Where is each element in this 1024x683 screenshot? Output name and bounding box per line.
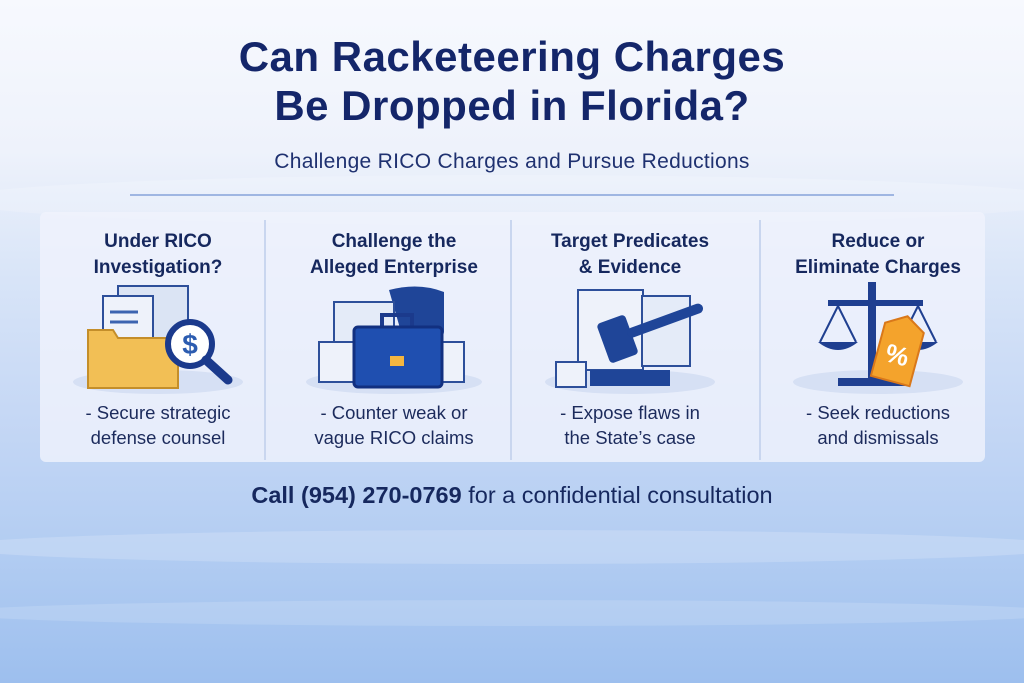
icon: folder with magnifier	[73, 285, 243, 394]
column: target predicates: & Evidence	[579, 257, 681, 278]
column: target predicates: Target Predicates	[551, 231, 709, 252]
call to action: Call (954) 270-0769 for a confidential consultation	[251, 482, 773, 508]
icon: scales with price tag: %	[882, 337, 912, 372]
column: challenge enterprise: Alleged Enterprise	[310, 257, 478, 278]
column: under investigation: Under RICO	[104, 231, 212, 252]
column: under investigation: - Secure strategic	[86, 402, 230, 423]
panel: four steps	[40, 212, 985, 462]
column: reduce charges	[793, 231, 963, 448]
column: reduce charges: - Seek reductions	[806, 402, 950, 423]
icon: briefcase with shield	[306, 286, 482, 394]
column: target predicates	[545, 231, 715, 448]
icon: gavel with documents	[545, 289, 715, 394]
icon: folder with magnifier: $	[182, 329, 198, 360]
title: Be Dropped in Florida?	[274, 82, 750, 129]
column: challenge enterprise: - Counter weak or	[320, 402, 468, 423]
column: under investigation	[73, 231, 243, 448]
column: challenge enterprise: vague RICO claims	[314, 427, 474, 448]
column: target predicates: - Expose flaws in	[560, 402, 700, 423]
column: challenge enterprise	[306, 231, 482, 448]
column: target predicates: the State’s case	[564, 427, 696, 448]
column: reduce charges: and dismissals	[817, 427, 939, 448]
column: challenge enterprise: Challenge the	[332, 231, 456, 252]
column: under investigation: Investigation?	[94, 257, 222, 278]
column: reduce charges: Reduce or	[832, 231, 924, 252]
subtitle: Challenge RICO Charges and Pursue Reductions	[274, 150, 750, 173]
column: reduce charges: Eliminate Charges	[795, 257, 961, 278]
column: under investigation: defense counsel	[91, 427, 225, 448]
title	[239, 33, 785, 129]
icon: scales with price tag	[793, 282, 963, 394]
title: Can Racketeering Charges	[239, 33, 785, 80]
